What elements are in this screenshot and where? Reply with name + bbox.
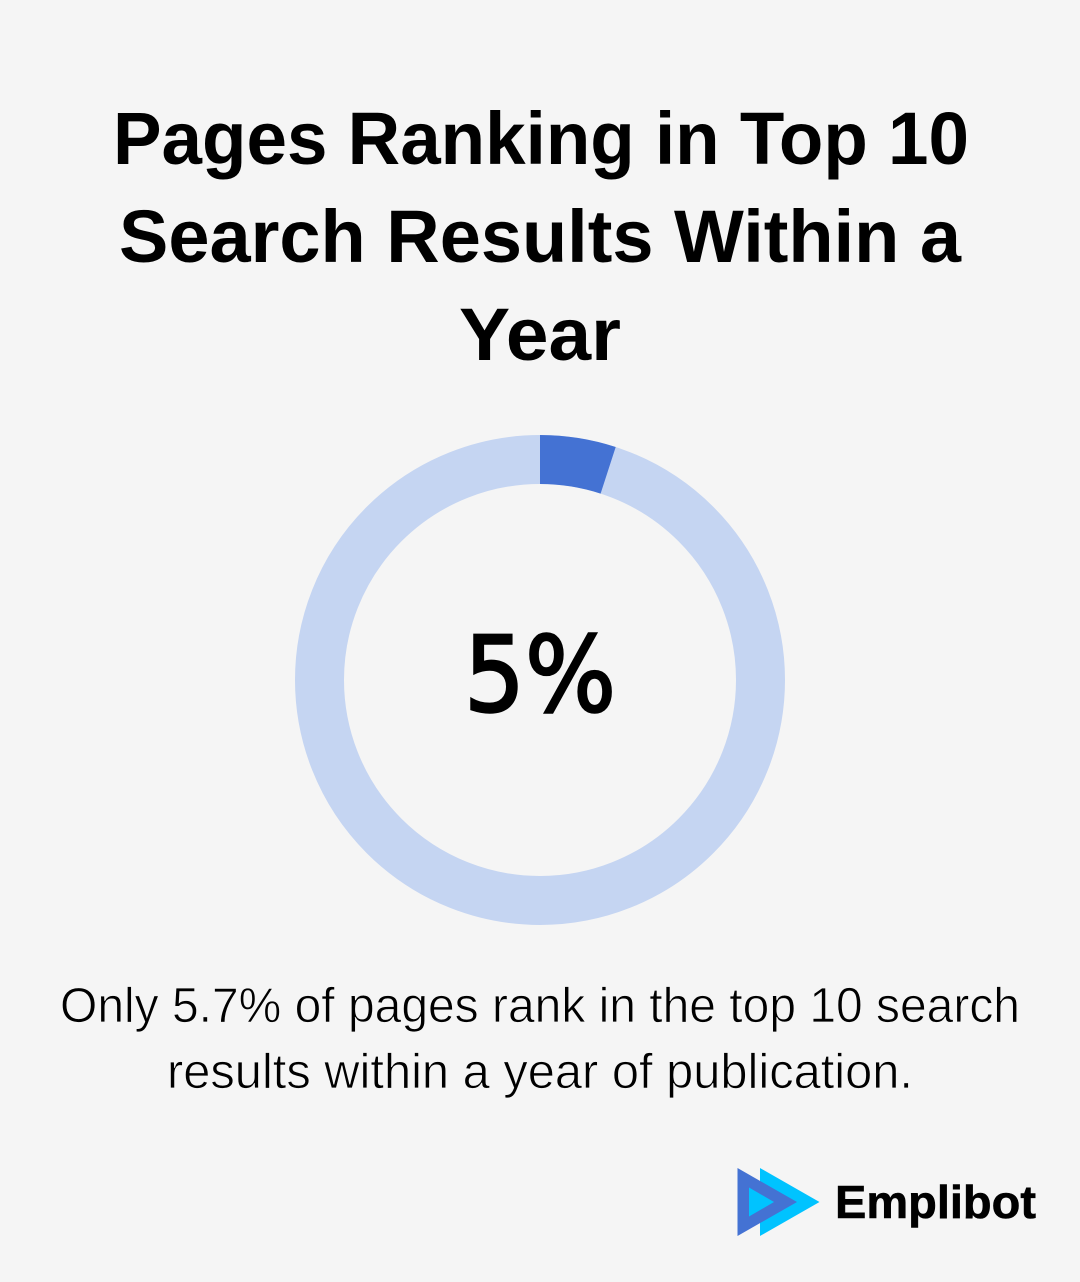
wordmark: Emplibot — [835, 1176, 1036, 1228]
title: Search Results Within a — [119, 195, 962, 278]
title: Year — [459, 293, 621, 376]
donut chart — [320, 435, 760, 900]
logo: Emplibot — [738, 1168, 1036, 1236]
title: Pages Ranking in Top 10 — [113, 97, 969, 180]
description text: Only 5.7% of pages rank in the top 10 search — [60, 979, 1020, 1033]
center value: 5% — [464, 614, 616, 736]
icon: play triangles — [738, 1168, 820, 1236]
description text — [60, 979, 1020, 1099]
donut highlighted segment — [540, 435, 616, 494]
description text: results within a year of publication. — [167, 1045, 913, 1099]
title — [113, 97, 969, 376]
donut track — [320, 460, 760, 900]
